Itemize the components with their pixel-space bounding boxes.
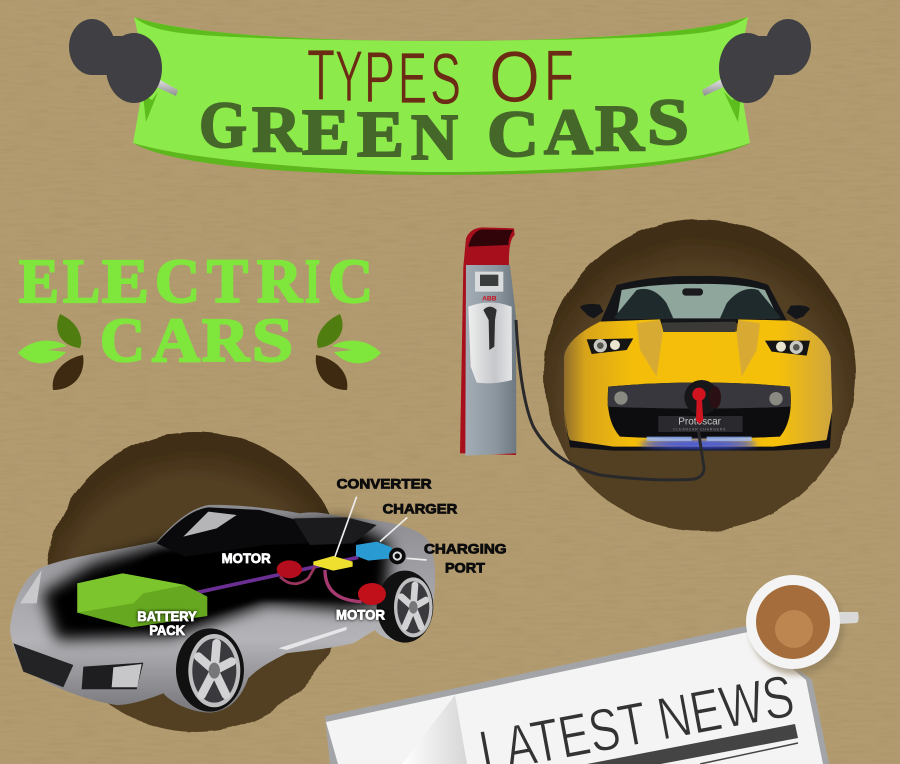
hood panels xyxy=(637,320,760,377)
left pin xyxy=(69,19,178,103)
car body xyxy=(10,505,435,713)
heading: green cars: R xyxy=(252,93,302,166)
side-view car with component diagram xyxy=(10,476,507,713)
label: converter: CONVERTER xyxy=(337,476,432,492)
label: battery pack: BATTERY xyxy=(137,608,197,624)
yellow sports car plugged in xyxy=(516,276,832,480)
heading: types of: P xyxy=(364,38,395,118)
heading: green cars: S xyxy=(647,86,689,159)
section heading: electric cars xyxy=(19,248,373,375)
charging cable xyxy=(516,320,704,480)
charging station xyxy=(460,227,516,456)
heading: types of: F xyxy=(544,36,574,116)
heading: types of xyxy=(307,36,574,120)
leader lines xyxy=(335,497,427,560)
label: battery pack xyxy=(137,608,197,638)
converter box xyxy=(313,556,353,571)
newspaper xyxy=(325,626,829,764)
heading: green cars: C xyxy=(487,98,539,171)
wing mirrors xyxy=(580,304,810,319)
label: motor rear: MOTOR xyxy=(336,607,385,623)
lights row xyxy=(647,437,752,441)
motor front xyxy=(277,560,302,578)
coffee cup xyxy=(746,575,859,675)
section heading: electric cars: L xyxy=(63,248,100,316)
page xyxy=(326,632,823,764)
charging port xyxy=(389,548,406,564)
heading: green cars: A xyxy=(544,96,593,169)
motor rear xyxy=(358,583,386,605)
page fold xyxy=(402,695,467,764)
battery pack xyxy=(77,573,207,627)
red plug xyxy=(692,388,706,424)
rear wheel xyxy=(377,571,433,643)
heading: types of: S xyxy=(430,40,461,120)
heading: types of: Y xyxy=(335,37,363,117)
section heading: electric cars: C xyxy=(155,248,200,316)
windshield and cabin xyxy=(157,507,377,557)
heading: green cars xyxy=(199,86,689,174)
dark shading over body xyxy=(42,520,390,640)
power cables xyxy=(193,557,362,602)
icon: left leaves xyxy=(18,314,83,390)
number plate: CLEANCAR CHARGERS xyxy=(673,428,726,432)
panel: circular pit behind side-view car xyxy=(46,432,346,732)
section heading: electric cars: R xyxy=(202,307,250,375)
section heading: electric cars: I xyxy=(305,248,320,316)
ribbon xyxy=(133,17,750,175)
section heading: electric cars: E xyxy=(102,248,149,316)
headline rule xyxy=(587,724,798,764)
heading: types of: E xyxy=(398,39,427,119)
headlights xyxy=(587,338,810,356)
blue glow xyxy=(640,440,757,448)
heading: green cars: G xyxy=(199,89,247,162)
label: charger: CHARGER xyxy=(383,501,457,517)
label: charging port: CHARGING xyxy=(424,541,507,557)
sill highlight xyxy=(278,627,347,650)
label: charging port: PORT xyxy=(445,560,485,576)
panel: circular pit behind yellow car xyxy=(544,219,856,531)
section heading: electric cars: S xyxy=(252,307,293,375)
label: charging port xyxy=(424,541,507,576)
icon: right leaves xyxy=(316,314,381,390)
section heading: electric cars: C xyxy=(328,248,373,316)
number plate: Protoscar xyxy=(678,417,722,428)
heading: types of: O xyxy=(489,38,540,118)
label: motor front: MOTOR xyxy=(222,550,271,566)
front grille xyxy=(608,380,791,439)
lower front bumper xyxy=(13,570,143,689)
right pin xyxy=(702,19,811,103)
heading: types of: T xyxy=(307,36,335,116)
section heading: electric cars: T xyxy=(207,248,248,316)
section heading: electric cars: C xyxy=(100,307,145,375)
title banner xyxy=(69,17,811,175)
page edge shadow xyxy=(325,626,829,764)
windshield and cabin xyxy=(600,276,788,323)
heading: green cars: E xyxy=(357,98,404,171)
charging station: ABB xyxy=(482,296,497,303)
heading: green cars: N xyxy=(411,101,458,174)
front wheel xyxy=(176,628,244,712)
section heading: electric cars: E xyxy=(19,248,59,316)
charger box xyxy=(356,542,392,561)
heading: green cars: E xyxy=(302,96,350,169)
label: battery pack: PACK xyxy=(149,622,185,638)
car body xyxy=(564,319,832,448)
number plate xyxy=(658,416,743,432)
section heading: electric cars: R xyxy=(257,248,303,316)
heading: green cars: R xyxy=(595,92,645,165)
section heading: electric cars: A xyxy=(152,307,200,375)
